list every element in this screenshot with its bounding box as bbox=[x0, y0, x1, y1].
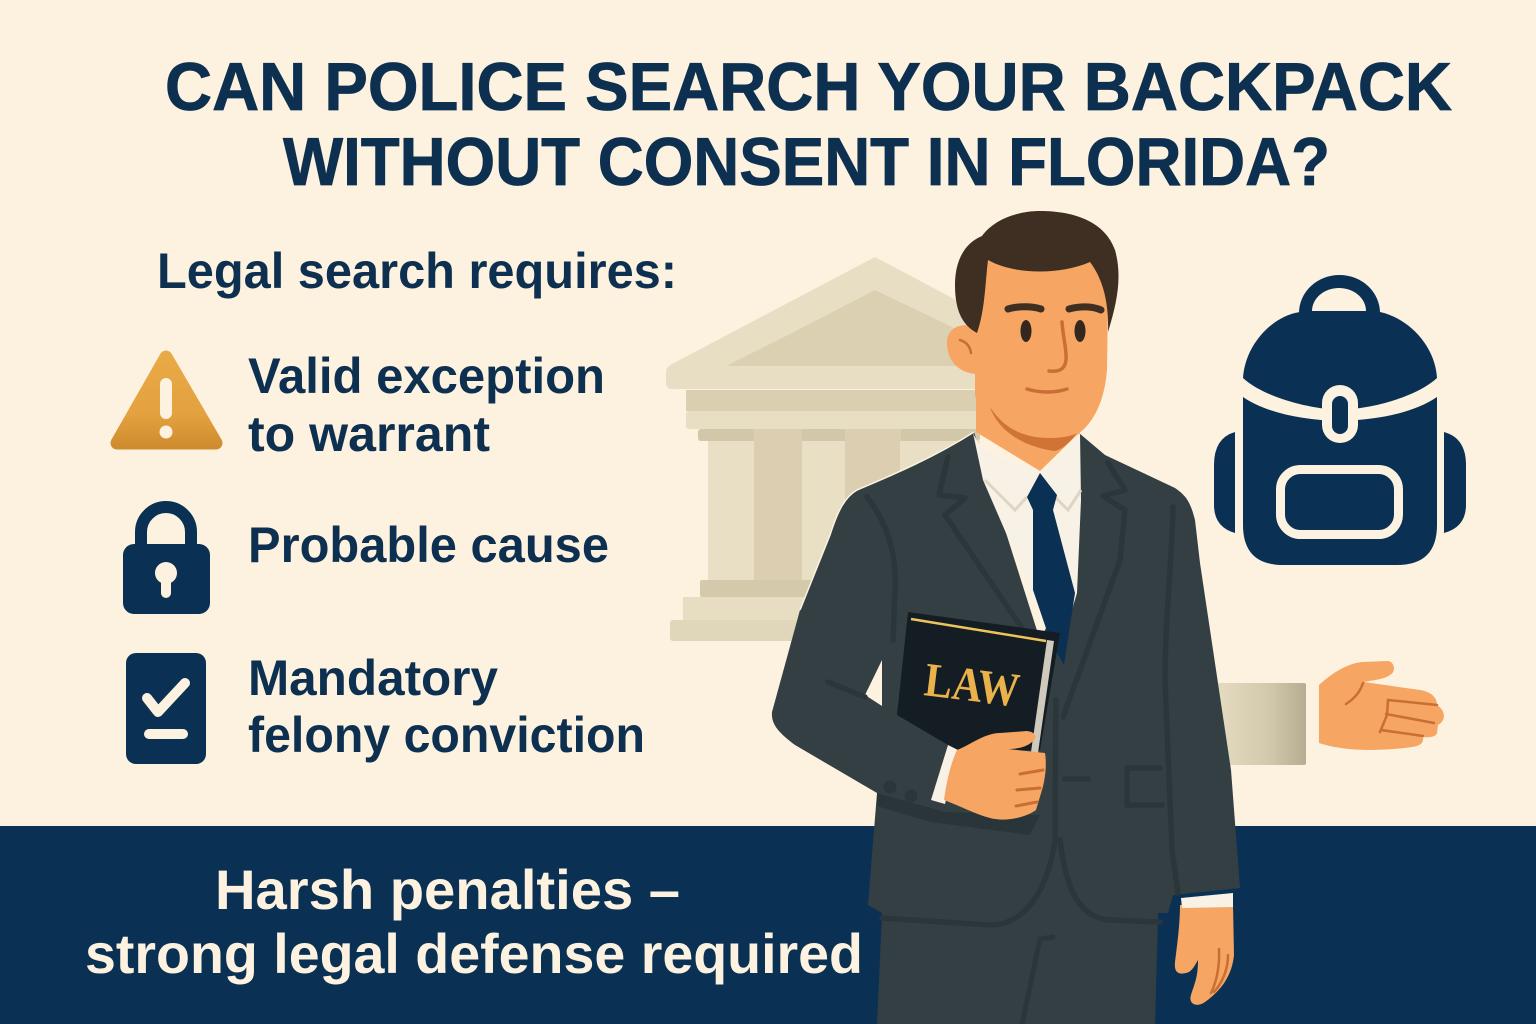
face bbox=[975, 250, 1108, 440]
chin shadow bbox=[990, 407, 1077, 451]
requirement: mandatory felony conviction: felony conviction bbox=[248, 707, 645, 763]
suit jacket bbox=[772, 432, 1240, 920]
law book bbox=[897, 612, 1060, 753]
courthouse background illustration bbox=[666, 257, 981, 641]
hair bbox=[955, 211, 1119, 333]
requirement: mandatory felony conviction: Mandatory bbox=[248, 650, 498, 706]
eyes bbox=[1020, 320, 1086, 342]
lawyer figure bbox=[772, 211, 1240, 1024]
requirement: valid exception: Valid exception bbox=[248, 348, 605, 404]
holding hand bbox=[944, 731, 1046, 820]
requirement: valid exception: to warrant bbox=[248, 406, 490, 462]
left shirt cuff bbox=[931, 745, 958, 804]
head bbox=[947, 211, 1119, 451]
title bbox=[165, 49, 1452, 200]
pale shoulder outline bbox=[800, 432, 974, 610]
tie bbox=[1027, 473, 1075, 665]
trousers bbox=[877, 820, 1158, 1024]
icon: warning triangle bbox=[117, 357, 216, 443]
icon: open hand bbox=[1319, 661, 1444, 750]
trouser crease bbox=[1022, 937, 1053, 1024]
icon: checklist document bbox=[126, 653, 206, 764]
hanging hand bbox=[1175, 905, 1234, 1005]
requirement: probable cause: Probable cause bbox=[248, 517, 609, 573]
neck bbox=[976, 400, 1085, 471]
requirement: valid exception bbox=[248, 348, 605, 462]
subheading: Legal search requires: bbox=[157, 243, 677, 299]
right shirt cuff bbox=[1181, 893, 1233, 908]
gap between arm and body bbox=[865, 660, 882, 706]
jacket seams bbox=[828, 457, 1178, 925]
title: WITHOUT CONSENT IN FLORIDA? bbox=[283, 124, 1330, 200]
banner text: Harsh penalties – bbox=[215, 858, 680, 921]
sleeve shadow bbox=[877, 793, 1040, 835]
title: CAN POLICE SEARCH YOUR BACKPACK bbox=[165, 49, 1452, 125]
ear bbox=[947, 325, 976, 374]
shirt bbox=[973, 433, 1081, 650]
jacket sleeve buttons bbox=[884, 780, 918, 802]
bottom banner bbox=[0, 826, 1536, 1024]
arm sleeve offering hand bbox=[1215, 683, 1306, 765]
banner text bbox=[85, 858, 863, 985]
icon: padlock bbox=[123, 507, 210, 614]
eyebrows bbox=[1008, 307, 1101, 310]
icon: backpack bbox=[1214, 275, 1466, 565]
nose and mouth bbox=[1027, 322, 1067, 392]
requirement: mandatory felony conviction bbox=[248, 650, 645, 763]
book title: LAW bbox=[922, 653, 1022, 717]
banner text: strong legal defense required bbox=[85, 922, 863, 985]
